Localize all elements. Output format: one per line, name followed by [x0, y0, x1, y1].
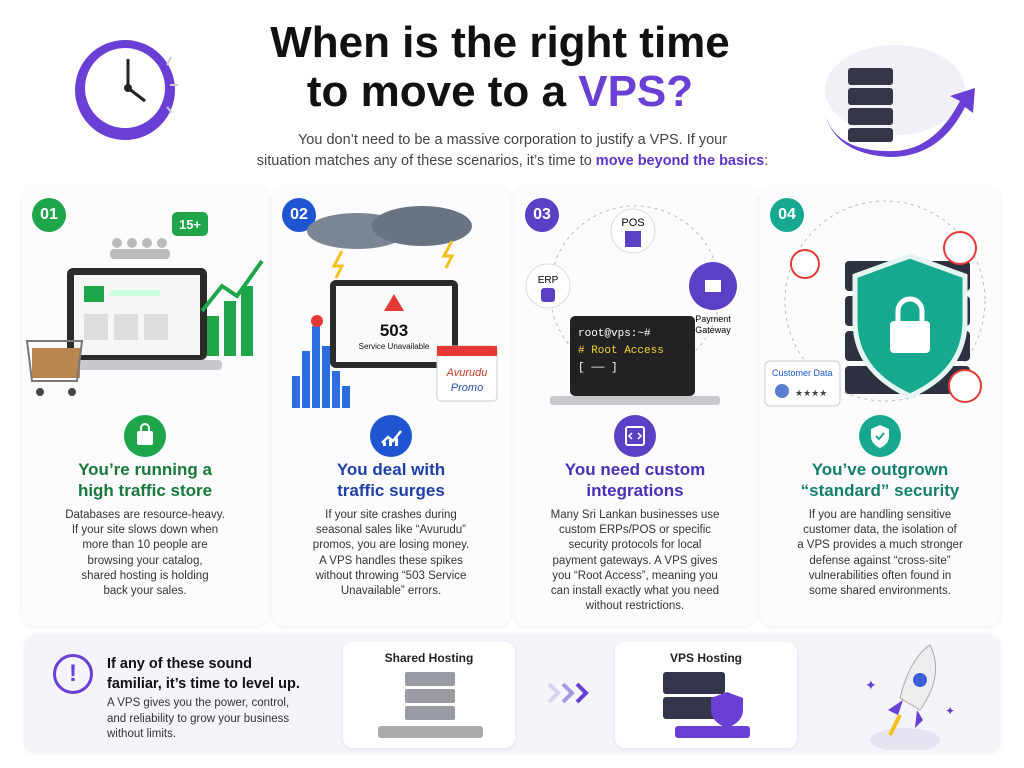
illustration: integrations laptop: [ —— ]: [578, 362, 618, 374]
panel: bottom call to action: [25, 634, 1000, 752]
heading: [565, 460, 705, 500]
illustration: integrations laptop: Gateway: [695, 325, 731, 335]
body text: you “Root Access”, meaning you: [552, 570, 718, 582]
illustration: integrations laptop: ERP: [538, 275, 559, 286]
body text: defense against “cross-site”: [809, 555, 951, 567]
illustration: store laptop: 15+: [179, 217, 201, 232]
illustration: shield server: [764, 200, 986, 406]
icon: chart: [370, 415, 412, 457]
body text: some shared environments.: [809, 585, 951, 597]
body text: without restrictions.: [586, 600, 684, 612]
illustration: integrations laptop: Payment: [695, 314, 731, 324]
illustration: integrations laptop: # Root Access: [578, 345, 664, 357]
illustration: storm and 503 monitor: [292, 206, 498, 408]
subtitle: situation matches any of these scenarios, it’s time to move beyond the basics:: [257, 153, 768, 169]
cta heading: [107, 656, 300, 692]
heading: [337, 460, 445, 500]
body text: vulnerabilities often found in: [809, 570, 951, 582]
body text: [65, 509, 225, 597]
badge 03: [525, 198, 559, 232]
body text: If you are handling sensitive: [809, 509, 951, 521]
illustration: integrations laptop: root@vps:~#: [578, 328, 651, 340]
icon: cloud server: [825, 45, 975, 157]
box: shared hosting: Shared Hosting: [385, 651, 473, 665]
title: to move to a VPS?: [307, 67, 693, 116]
cta text: [107, 697, 289, 740]
heading: integrations: [586, 481, 684, 500]
badge 01: [32, 198, 66, 232]
badge 01: 01: [40, 206, 58, 223]
body text: If your site crashes during: [325, 509, 457, 521]
body text: Many Sri Lankan businesses use: [551, 509, 719, 521]
icon: clock: [75, 40, 178, 140]
illustration: integrations laptop: POS: [621, 217, 645, 229]
cta text: and reliability to grow your business: [107, 712, 289, 724]
illustration: storm and 503 monitor: 503: [380, 321, 408, 340]
box: VPS hosting: [615, 642, 797, 748]
heading: You’re running a: [78, 460, 212, 479]
icon: rocket: [865, 644, 955, 750]
body text: A VPS handles these spikes: [319, 555, 463, 567]
body text: Unavailable” errors.: [341, 585, 441, 597]
heading: You’ve outgrown: [812, 460, 948, 479]
body text: seasonal sales like “Avurudu”: [316, 524, 466, 536]
illustration: storm and 503 monitor: Service Unavailable: [359, 342, 430, 351]
cta text: without limits.: [107, 728, 176, 740]
heading: traffic surges: [337, 481, 445, 500]
body text: browsing your catalog,: [87, 555, 203, 567]
body text: more than 10 people are: [82, 539, 208, 551]
cta heading: If any of these sound: [107, 656, 252, 672]
body text: security protocols for local: [569, 539, 701, 551]
subtitle: [257, 132, 768, 169]
body text: a VPS provides a much stronger: [797, 539, 963, 551]
heading: [801, 460, 960, 500]
body text: without throwing “503 Service: [316, 570, 466, 582]
cta heading: familiar, it’s time to level up.: [107, 676, 300, 692]
title: [270, 18, 730, 116]
badge 02: 02: [290, 206, 308, 223]
body text: customer data, the isolation of: [803, 524, 957, 536]
icon: shield check: [859, 415, 901, 457]
illustration: storm and 503 monitor: Avurudu: [446, 367, 487, 379]
icon: shopping bag: [124, 415, 166, 457]
body text: payment gateways. A VPS gives: [553, 555, 717, 567]
heading: “standard” security: [801, 481, 959, 500]
icon: rocket: ✦: [945, 704, 955, 718]
icon: exclamation: !: [69, 660, 77, 687]
body text: [313, 509, 469, 597]
body text: promos, you are losing money.: [313, 539, 469, 551]
body text: custom ERPs/POS or specific: [559, 524, 711, 536]
icon: exclamation: [53, 654, 93, 694]
icon: rocket: ✦: [865, 677, 877, 693]
arrow: chevrons: [548, 682, 589, 704]
illustration: shield server: Customer Data: [772, 368, 833, 378]
illustration: storm and 503 monitor: Promo: [451, 382, 483, 394]
body text: [797, 509, 963, 597]
body text: back your sales.: [103, 585, 187, 597]
badge 02: [282, 198, 316, 232]
title: When is the right time: [270, 18, 730, 67]
body text: [551, 509, 719, 612]
box: shared hosting: [343, 642, 515, 748]
badge 03: 03: [533, 206, 551, 223]
heading: [78, 460, 212, 500]
cta text: A VPS gives you the power, control,: [107, 697, 289, 709]
heading: You need custom: [565, 460, 705, 479]
heading: You deal with: [337, 460, 445, 479]
badge 04: 04: [778, 206, 796, 223]
icon: code: [614, 415, 656, 457]
illustration: store laptop: [26, 212, 264, 396]
body text: If your site slows down when: [72, 524, 218, 536]
subtitle: You don’t need to be a massive corporation to justify a VPS. If your: [298, 132, 727, 148]
panel: 03: [515, 186, 755, 626]
badge 04: [770, 198, 804, 232]
body text: can install exactly what you need: [551, 585, 719, 597]
body text: Databases are resource-heavy.: [65, 509, 225, 521]
heading: high traffic store: [78, 481, 212, 500]
illustration: shield server: ★★★★: [795, 388, 827, 398]
panel: 04: [760, 186, 1000, 626]
panel: 02: [272, 186, 510, 626]
body text: shared hosting is holding: [81, 570, 209, 582]
illustration: integrations laptop: [526, 206, 737, 405]
panel: 01: [22, 186, 268, 626]
box: VPS hosting: VPS Hosting: [670, 651, 742, 665]
